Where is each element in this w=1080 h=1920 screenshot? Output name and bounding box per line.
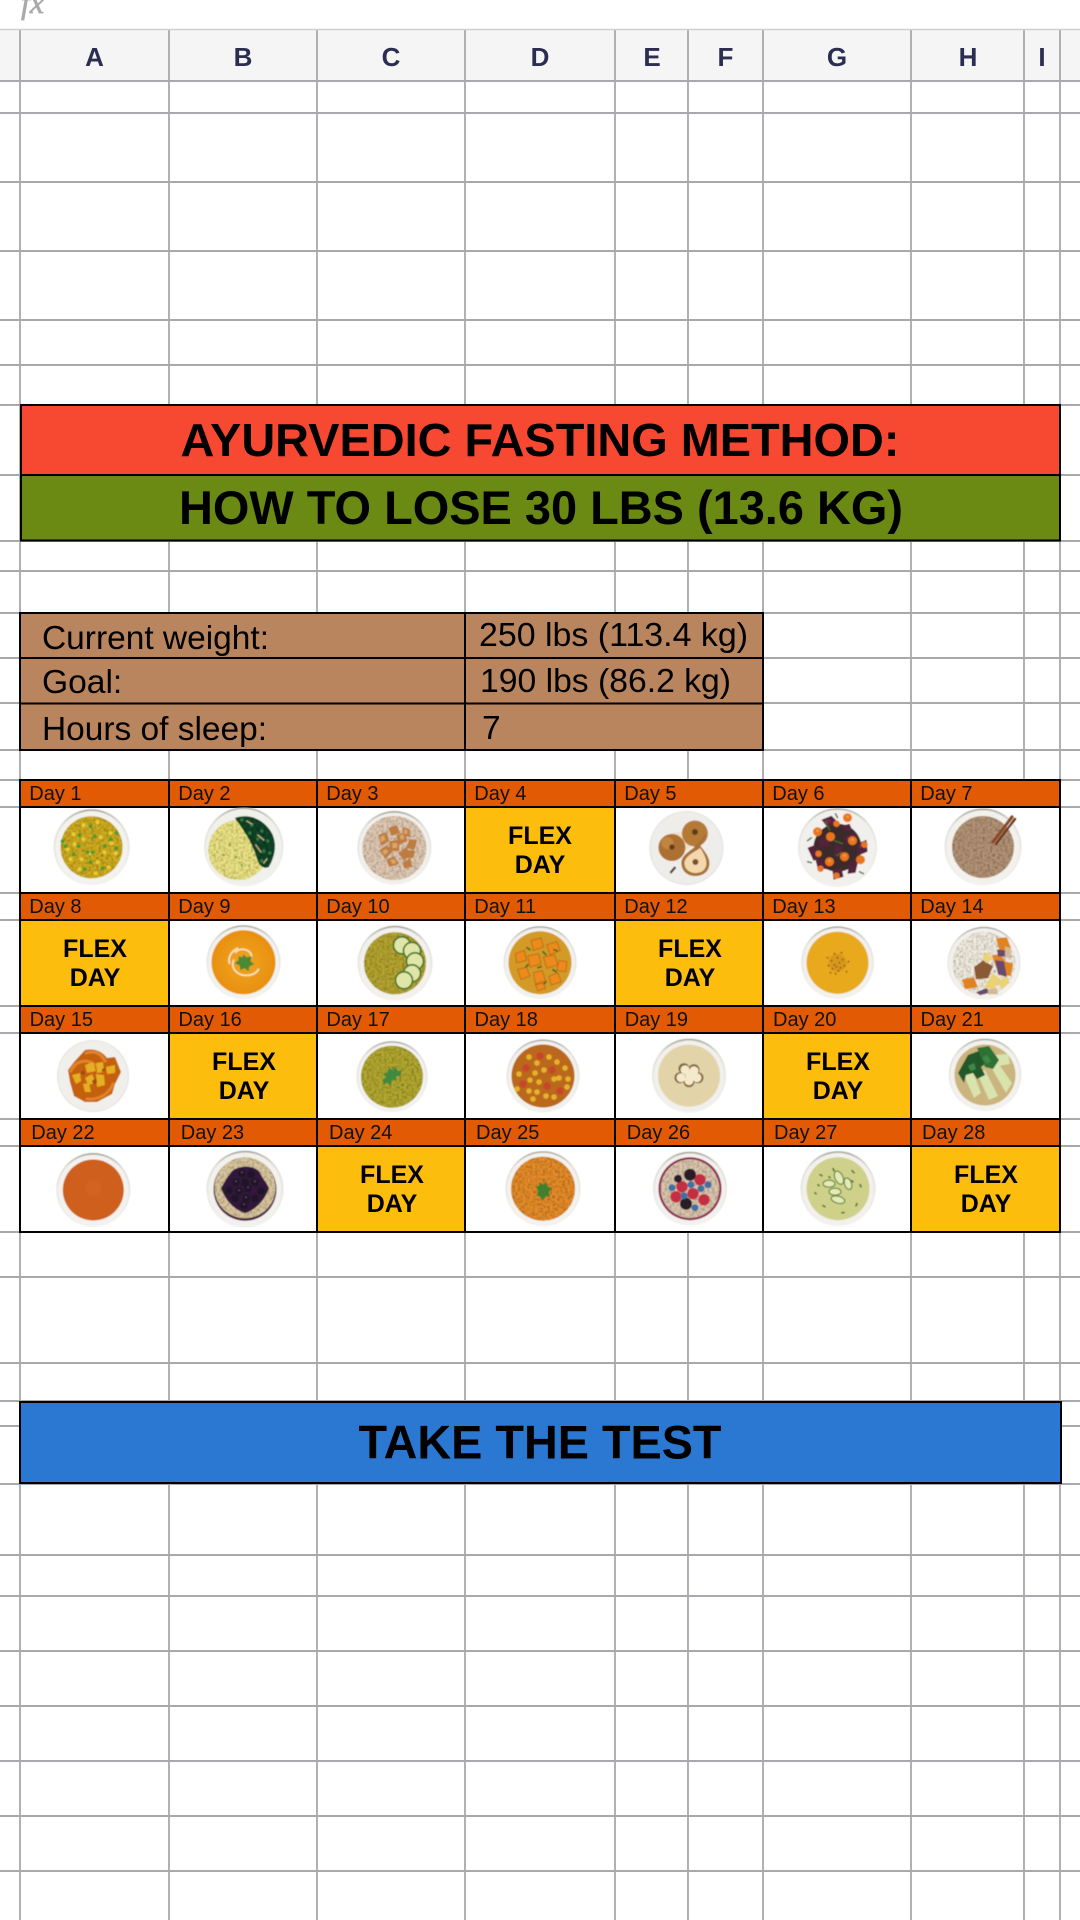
day 23 xyxy=(169,1119,317,1232)
day 1: Day 1 xyxy=(29,783,82,805)
flex day label: DAY xyxy=(961,1190,1012,1218)
column header E: E xyxy=(643,42,661,72)
hours of sleep value: 7 xyxy=(482,710,501,747)
current weight label: Current weight: xyxy=(42,620,269,657)
icon: bok choy broth xyxy=(949,1039,1021,1111)
day 2 xyxy=(169,780,317,893)
day 26 xyxy=(615,1119,763,1232)
icon: oatmeal with apple xyxy=(357,811,431,885)
column header G: G xyxy=(827,42,847,72)
flex day label: FLEX xyxy=(63,935,127,963)
day 24: Day 24 xyxy=(329,1122,392,1144)
flex day label: DAY xyxy=(813,1077,864,1105)
icon: porridge with cinnamon xyxy=(944,808,1022,886)
icon: roasted beets and carrots xyxy=(798,808,877,887)
day 5: Day 5 xyxy=(624,783,677,805)
column header H: H xyxy=(959,42,977,72)
day 3 xyxy=(317,780,465,893)
day 21: Day 21 xyxy=(920,1009,984,1031)
day 6 xyxy=(763,780,911,893)
day 2: Day 2 xyxy=(178,783,231,805)
day 19 xyxy=(615,1006,763,1119)
day 22: Day 22 xyxy=(31,1122,95,1144)
day 5 xyxy=(615,780,763,893)
icon: golden soup with spice xyxy=(801,926,874,999)
flex day label: DAY xyxy=(219,1077,270,1105)
flex day label: FLEX xyxy=(360,1161,424,1189)
icon: carrot lentil soup xyxy=(506,1151,580,1226)
call to action button xyxy=(20,1402,1061,1483)
day 16: Day 16 xyxy=(178,1009,242,1031)
day 23: Day 23 xyxy=(181,1122,244,1144)
day 13: Day 13 xyxy=(772,896,836,918)
icon: lentil soup with herb xyxy=(356,1041,428,1112)
column header I: I xyxy=(1038,42,1046,72)
day 15 xyxy=(20,1006,169,1119)
icon: rice with roasted vegetables xyxy=(948,927,1020,1000)
day 18: Day 18 xyxy=(474,1009,538,1031)
day 21 xyxy=(911,1006,1060,1119)
day 17 xyxy=(317,1006,465,1119)
day 22 xyxy=(20,1119,169,1232)
current weight value: 250 lbs (113.4 kg) xyxy=(479,617,748,654)
day 14: Day 14 xyxy=(920,896,984,918)
stats table xyxy=(20,613,763,750)
goal value: 190 lbs (86.2 kg) xyxy=(480,663,731,700)
flex day label: DAY xyxy=(70,964,121,992)
hours of sleep label: Hours of sleep: xyxy=(42,711,267,748)
icon: baked apples and pear xyxy=(649,811,723,885)
day 26: Day 26 xyxy=(627,1122,690,1144)
column header C: C xyxy=(382,42,401,72)
icon: yellow rice with peas xyxy=(54,809,130,885)
day 7: Day 7 xyxy=(920,783,973,805)
day 8 xyxy=(20,893,169,1006)
day 16 xyxy=(169,1006,317,1119)
icon: squash soup with cilantro xyxy=(206,925,280,999)
day 15: Day 15 xyxy=(30,1009,93,1031)
day 28: Day 28 xyxy=(922,1122,985,1144)
day 10 xyxy=(317,893,465,1006)
flex day label: FLEX xyxy=(658,935,722,963)
icon: pumpkin curry xyxy=(504,926,576,999)
column header A: A xyxy=(85,42,104,72)
meal calendar xyxy=(20,780,1060,1232)
day 3: Day 3 xyxy=(326,783,379,805)
icon: rice with spinach xyxy=(204,807,283,887)
day 4 xyxy=(465,780,615,893)
day 28 xyxy=(911,1119,1060,1232)
flex day label: FLEX xyxy=(212,1048,276,1076)
day 11: Day 11 xyxy=(474,896,536,918)
flex day label: FLEX xyxy=(954,1161,1018,1189)
day 25: Day 25 xyxy=(476,1122,539,1144)
flex day label: DAY xyxy=(367,1190,418,1218)
day 10: Day 10 xyxy=(326,896,390,918)
column header D: D xyxy=(531,42,549,72)
day 6: Day 6 xyxy=(772,783,825,805)
icon: zucchini soup xyxy=(800,1151,876,1226)
day 14 xyxy=(911,893,1060,1006)
icon: oatmeal with mixed berries xyxy=(653,1152,727,1226)
icon: green lentils with cucumber xyxy=(358,926,432,1001)
flex day label: DAY xyxy=(515,851,566,879)
day 8: Day 8 xyxy=(29,896,82,918)
day 27 xyxy=(763,1119,911,1232)
flex day label: DAY xyxy=(665,964,716,992)
subtitle text: HOW TO LOSE 30 LBS (13.6 KG) xyxy=(179,481,903,534)
goal label: Goal: xyxy=(42,664,122,701)
button text: TAKE THE TEST xyxy=(358,1416,722,1468)
day 19: Day 19 xyxy=(625,1009,688,1031)
icon: tomato soup xyxy=(56,1153,130,1227)
flex day label: FLEX xyxy=(806,1048,870,1076)
day 12 xyxy=(615,893,763,1006)
title text: AYURVEDIC FASTING METHOD: xyxy=(180,414,900,466)
day 12: Day 12 xyxy=(624,896,688,918)
day 7 xyxy=(911,780,1060,893)
title banner xyxy=(21,405,1060,475)
column header B: B xyxy=(234,42,252,72)
day 4: Day 4 xyxy=(474,783,527,805)
subtitle banner xyxy=(21,475,1060,540)
day 20 xyxy=(763,1006,911,1119)
day 11 xyxy=(465,893,615,1006)
day 18 xyxy=(465,1006,615,1119)
icon: chickpea curry xyxy=(506,1040,580,1112)
day 20: Day 20 xyxy=(773,1009,836,1031)
column header F: F xyxy=(718,42,733,72)
column headers xyxy=(85,42,1046,72)
icon: roasted squash xyxy=(57,1040,129,1112)
day 13 xyxy=(763,893,911,1006)
icon: cauliflower soup xyxy=(652,1039,726,1113)
day 17: Day 17 xyxy=(326,1009,390,1031)
flex day label: FLEX xyxy=(508,822,572,850)
day 1 xyxy=(20,780,169,893)
day 9: Day 9 xyxy=(178,896,231,918)
day 25 xyxy=(465,1119,615,1232)
day 24 xyxy=(317,1119,465,1232)
day 9 xyxy=(169,893,317,1006)
icon: oatmeal with blueberries xyxy=(206,1151,284,1228)
day 27: Day 27 xyxy=(774,1122,837,1144)
